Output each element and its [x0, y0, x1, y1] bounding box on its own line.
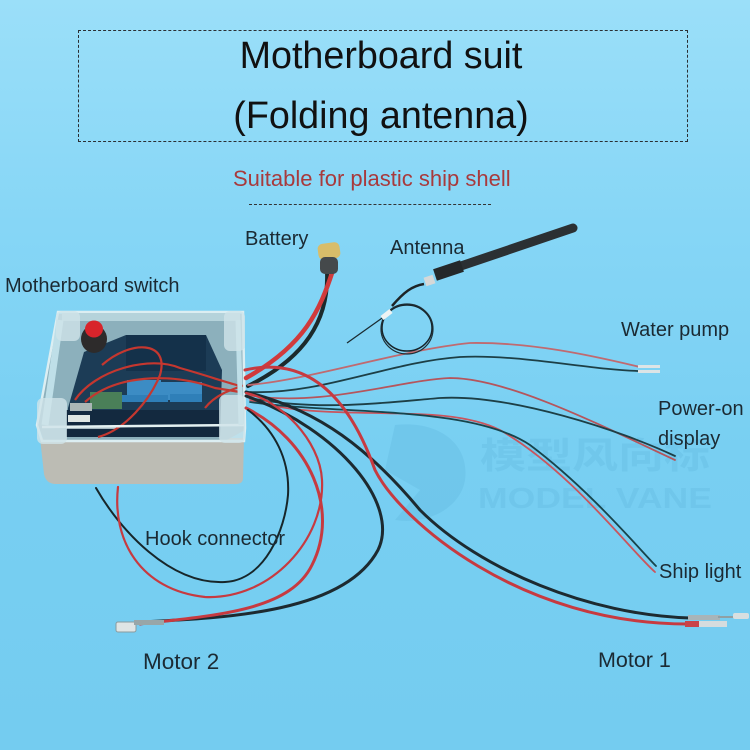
antenna	[347, 228, 573, 354]
motor 2	[140, 396, 383, 622]
label: ship light: Ship light	[659, 561, 741, 583]
label: hook connector: Hook connector	[145, 528, 285, 550]
motor 1	[246, 392, 690, 618]
label: power-on display: display	[658, 428, 720, 450]
red switch	[81, 320, 107, 353]
subtitle: Suitable for plastic ship shell	[233, 166, 511, 191]
title line 1: Motherboard suit	[240, 34, 522, 76]
label: motor 1: Motor 1	[598, 648, 671, 672]
battery leads	[248, 272, 327, 386]
white terminals	[70, 403, 92, 411]
label: water pump: Water pump	[621, 319, 729, 341]
ship light	[250, 400, 655, 572]
battery connector	[317, 242, 341, 274]
watermark: MODEL VANE	[478, 483, 712, 515]
internal wires	[75, 347, 245, 437]
label: battery: Battery	[245, 228, 308, 250]
label: antenna: Antenna	[390, 237, 465, 259]
label: power-on display	[658, 398, 744, 450]
box interior	[38, 314, 245, 441]
transparent lid edges	[37, 312, 245, 441]
water pump terminals	[638, 365, 660, 373]
circuit board	[66, 335, 222, 437]
label: motherboard switch: Motherboard switch	[5, 275, 180, 297]
motor 2 terminal	[116, 620, 164, 632]
wire harness	[96, 270, 690, 624]
enclosure box	[37, 311, 245, 484]
watermark: 模型风向标	[480, 435, 710, 476]
watermark	[385, 424, 712, 521]
hook connector	[96, 410, 288, 582]
power-on display	[248, 378, 675, 460]
water pump wires	[248, 343, 640, 385]
motor 1 terminals	[685, 613, 749, 627]
dashed underline	[249, 204, 491, 205]
label: power-on display: Power-on	[658, 398, 744, 420]
title line 2: (Folding antenna)	[233, 94, 529, 136]
box body	[40, 438, 244, 484]
title box	[78, 30, 688, 142]
label: motor 2: Motor 2	[143, 649, 219, 674]
